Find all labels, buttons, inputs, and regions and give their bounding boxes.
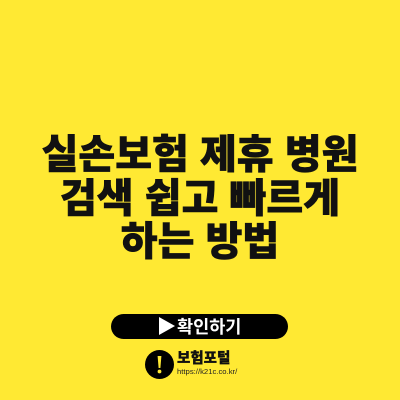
title line 1: 실손보험 제휴 병원 bbox=[42, 122, 358, 180]
logo: 보험포털 bbox=[145, 347, 238, 379]
icon: exclamation circle bbox=[145, 350, 174, 379]
title line 2: 검색 쉽고 빠르게 bbox=[60, 166, 340, 224]
button label: 확인하기 bbox=[177, 314, 241, 339]
title line 3: 하는 방법 bbox=[121, 209, 279, 267]
logo url: https://k21c.co.kr/ bbox=[177, 367, 237, 376]
title bbox=[42, 122, 358, 267]
logo name: 보험포털 bbox=[177, 347, 230, 368]
button: confirm bbox=[111, 314, 288, 339]
icon: play triangle bbox=[159, 317, 175, 335]
